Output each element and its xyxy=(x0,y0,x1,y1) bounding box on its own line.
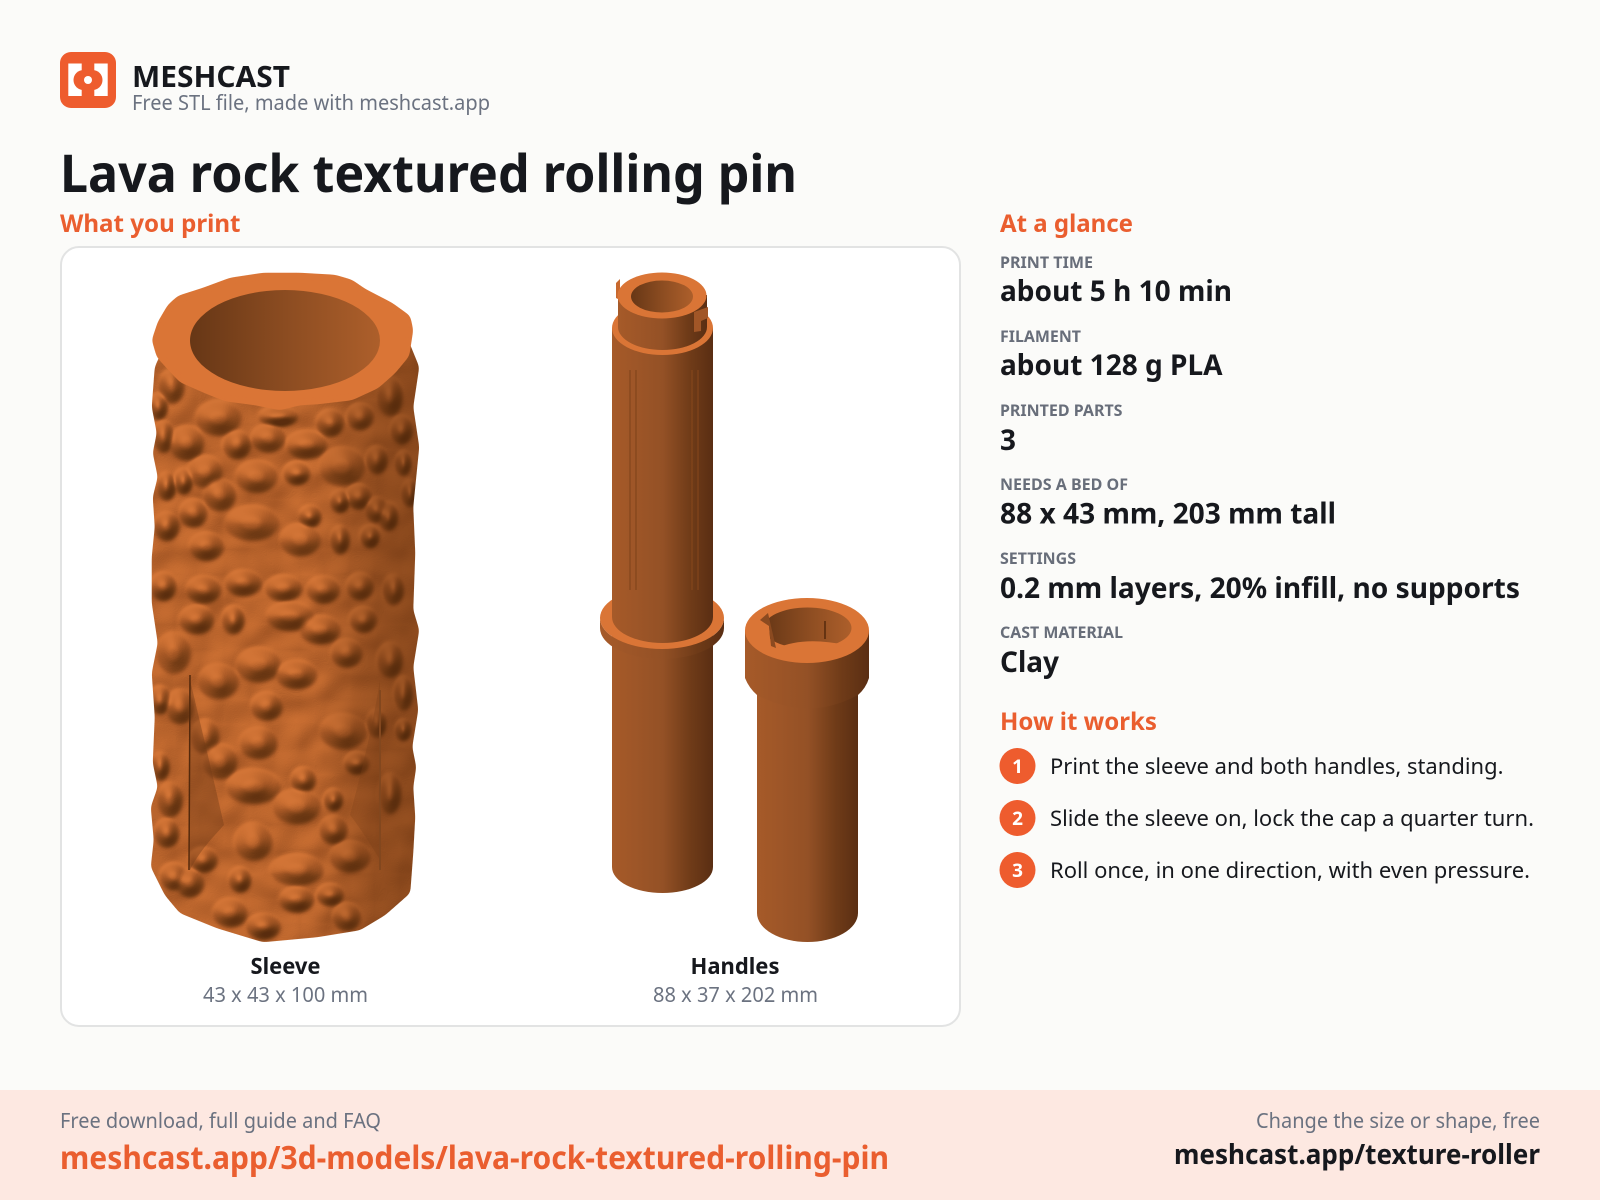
footer: customizer link xyxy=(1174,1107,1540,1173)
stat: print time xyxy=(1000,251,1232,310)
brand name: MESHCAST xyxy=(132,55,290,96)
stat: settings: SETTINGS xyxy=(1000,547,1076,569)
step 2: Slide the sleeve on, lock the cap a quarter turn. xyxy=(1050,803,1534,833)
caption: sleeve: Sleeve xyxy=(250,951,320,981)
stat: bed size: NEEDS A BED OF xyxy=(1000,473,1128,495)
footer: customizer link: meshcast.app/texture-roller xyxy=(1174,1135,1540,1173)
stat: bed size: 88 x 43 mm, 203 mm tall xyxy=(1000,494,1336,532)
footer band xyxy=(0,1090,1600,1200)
socket key xyxy=(758,613,771,650)
lower shaft xyxy=(612,630,713,893)
stat: cast material: CAST MATERIAL xyxy=(1000,621,1123,643)
lug xyxy=(694,307,708,332)
footer: customizer link: Change the size or shape, free xyxy=(1256,1107,1540,1135)
model render: long handle xyxy=(600,272,724,893)
model render: short handle xyxy=(745,598,869,942)
socket top xyxy=(745,598,869,663)
brand tagline: Free STL file, made with meshcast.app xyxy=(132,89,490,117)
heading: at a glance: At a glance xyxy=(1000,207,1133,240)
stat: printed parts: 3 xyxy=(1000,420,1016,459)
stat: filament: about 128 g PLA xyxy=(1000,345,1223,384)
step 3: 3 xyxy=(1012,857,1023,883)
flange xyxy=(600,618,724,659)
footer: download link: Free download, full guide and FAQ xyxy=(60,1107,381,1135)
step 3: Roll once, in one direction, with even pressure. xyxy=(1050,855,1530,885)
neck xyxy=(618,295,707,350)
shaft xyxy=(757,690,858,942)
caption: handles: Handles xyxy=(690,951,780,981)
sleeve top rim xyxy=(152,273,413,410)
socket floor xyxy=(776,641,846,649)
caption: sleeve xyxy=(203,951,368,1009)
upper shaft xyxy=(612,328,713,643)
stat: settings xyxy=(1000,547,1520,607)
stat: printed parts: PRINTED PARTS xyxy=(1000,399,1123,421)
stat: print time: PRINT TIME xyxy=(1000,251,1093,273)
brand logo icon xyxy=(60,52,116,108)
lower-side flats on sleeve xyxy=(189,675,380,870)
lumpy surface xyxy=(151,346,419,942)
shoulder xyxy=(612,301,713,355)
stat: cast material xyxy=(1000,621,1123,681)
step 1: Print the sleeve and both handles, standing. xyxy=(1050,751,1504,781)
panel: at a glance xyxy=(1000,207,1520,681)
stat: printed parts xyxy=(1000,399,1123,459)
panel: what you print xyxy=(61,247,960,1026)
stat: print time: about 5 h 10 min xyxy=(1000,271,1232,310)
caption: sleeve: 43 x 43 x 100 mm xyxy=(203,981,368,1009)
footer: download link xyxy=(60,1107,889,1179)
stat: cast material: Clay xyxy=(1000,642,1059,681)
footer: download link: meshcast.app/3d-models/lava-rock-textured-rolling-pin xyxy=(60,1136,889,1179)
model render: sleeve xyxy=(140,273,430,950)
step 1: 1 xyxy=(1012,753,1023,779)
heading: how it works: How it works xyxy=(1000,705,1157,738)
stat: bed size xyxy=(1000,473,1336,532)
socket body xyxy=(745,630,869,708)
stat: filament xyxy=(1000,325,1223,384)
shaft grooves xyxy=(630,370,698,590)
heading: what you print: What you print xyxy=(60,207,241,240)
sleeve bore xyxy=(190,290,380,391)
card background xyxy=(61,247,960,1026)
stat: settings: 0.2 mm layers, 20% infill, no supports xyxy=(1000,568,1520,607)
caption: handles: 88 x 37 x 202 mm xyxy=(653,981,818,1009)
stat: filament: FILAMENT xyxy=(1000,325,1081,347)
title: Lava rock textured rolling pin xyxy=(60,137,797,208)
caption: handles xyxy=(653,951,818,1009)
step 2: 2 xyxy=(1012,805,1023,831)
neck top xyxy=(618,272,706,318)
panel: how it works xyxy=(1000,705,1534,888)
